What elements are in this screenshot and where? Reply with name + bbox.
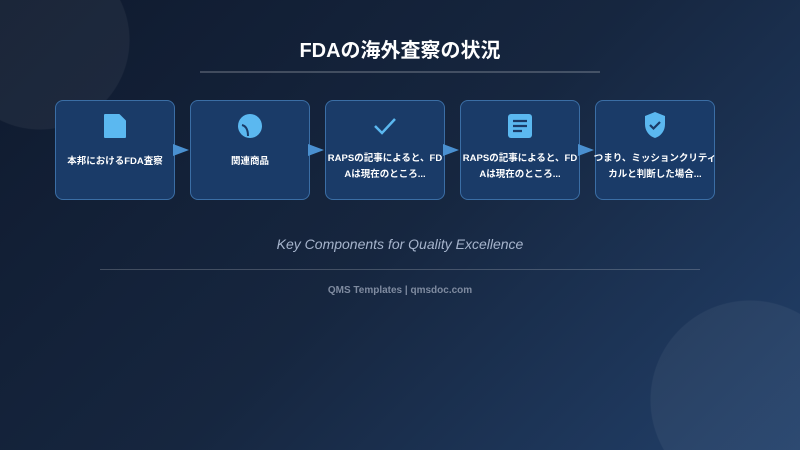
- step 2: [190, 100, 310, 200]
- arrow 2: [308, 144, 324, 156]
- icon: list: [508, 114, 532, 138]
- icon: shield: [645, 112, 665, 138]
- text 4: RAPSの記事によると、FDAは現在のところ...: [463, 153, 577, 180]
- arrow 3: [443, 144, 459, 156]
- arrow 1: [173, 144, 189, 156]
- title: FDAの海外査察の状況: [299, 40, 501, 62]
- step 1: [55, 100, 175, 200]
- text 2: 関連商品: [231, 156, 269, 167]
- step 3: [325, 100, 445, 200]
- icon: document: [104, 114, 126, 138]
- icon: circle: [238, 114, 262, 138]
- step 4: [460, 100, 580, 200]
- subtitle: Key Components for Quality Excellence: [277, 236, 523, 252]
- icon: check: [374, 118, 396, 135]
- text 5: つまり、ミッションクリティカルと判断した場合...: [594, 153, 716, 180]
- text 1: 本邦におけるFDA査察: [67, 156, 163, 167]
- step 5: [595, 100, 715, 200]
- text 3: RAPSの記事によると、FDAは現在のところ...: [328, 153, 442, 180]
- arrow 4: [578, 144, 594, 156]
- footer: QMS Templates | qmsdoc.com: [328, 285, 472, 296]
